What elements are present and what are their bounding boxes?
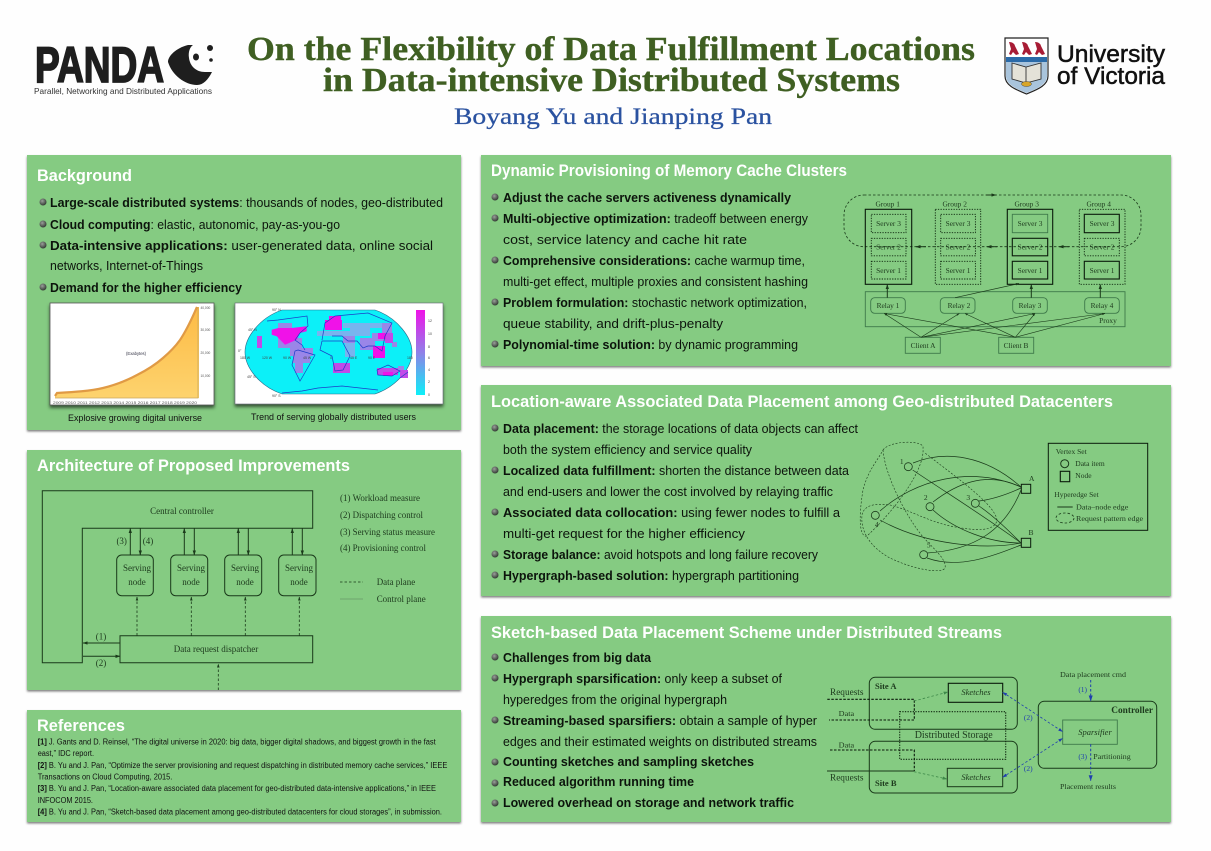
bullet list: sketch-based placement: Reduced algorithm running time — [503, 775, 694, 789]
diagram: architecture: (3) Serving status measure — [340, 527, 435, 537]
bullet list: location-aware placement: Hypergraph-based solution: hypergraph partitioning — [503, 569, 799, 583]
diagram: sketch placement: Site A — [875, 681, 897, 691]
chart: global users map: 4 — [428, 368, 430, 372]
title: On the Flexibility of Data Fulfillment Locations — [247, 31, 975, 68]
bullet list: dynamic provisioning: Comprehensive considerations: cache warmup time, — [503, 254, 805, 268]
diagram: cache clusters: Server 3 — [876, 219, 901, 228]
diagram: sketch placement: (1) — [1078, 685, 1088, 694]
diagram: architecture: node — [290, 577, 308, 587]
chart: global users map: 90° S — [272, 394, 281, 398]
panel: sketch-based placement — [481, 616, 1171, 822]
heading: references: References — [37, 717, 125, 735]
diagram: hypergraph: 2 — [924, 493, 928, 502]
diagram: sketch placement: Requests — [830, 687, 864, 697]
diagram: cache clusters: Relay 1 — [877, 301, 900, 310]
bullet list: dynamic provisioning: multi-get effect, multiple proxies and consistent hashing — [503, 275, 808, 289]
chart: digital universe growth: 10,000 — [200, 374, 210, 378]
title: in Data-intensive Distributed Systems — [323, 62, 900, 99]
diagram: sketch placement: Requests — [830, 772, 864, 782]
bullet list: background: networks, Internet-of-Things — [50, 259, 203, 273]
bullet list: dynamic provisioning: Adjust the cache servers activeness dynamically — [503, 191, 791, 205]
diagram: architecture: (4) — [143, 536, 153, 546]
chart: digital universe growth: 20,000 — [200, 351, 210, 355]
reference list: [2] B. Yu and J. Pan, “Optimize the server provisioning and request dispatching in distributed memory cache services,” IEEE — [38, 761, 447, 770]
diagram: architecture: (3) — [116, 536, 127, 546]
logo: University of Victoria: University — [1057, 41, 1165, 68]
bullet list: dynamic provisioning — [492, 191, 809, 352]
diagram: hypergraph: Request pattern edge — [1076, 514, 1144, 523]
diagram: hypergraph: 5 — [927, 540, 931, 550]
bullet list: background — [40, 196, 443, 295]
reference list: INFOCOM 2015. — [38, 796, 93, 805]
bullet list: dynamic provisioning: Multi-objective optimization: tradeoff between energy — [503, 212, 809, 226]
bullet list: sketch-based placement: Streaming-based sparsifiers: obtain a sample of hyper — [503, 714, 817, 728]
diagram: architecture — [42, 491, 435, 690]
bullet list: sketch-based placement: edges and their estimated weights on distributed streams — [503, 735, 817, 749]
heading: architecture: Architecture of Proposed Improvements — [37, 457, 350, 475]
logo: University of Victoria — [1005, 38, 1166, 94]
diagram: cache clusters: Client A — [911, 341, 936, 350]
bullet list: background: Data-intensive applications: user-generated data, online social — [50, 239, 433, 253]
diagram: sketch placement: (2) — [1024, 764, 1033, 773]
diagram: architecture: (4) Provisioning control — [340, 543, 426, 553]
diagram: cache clusters: Server 1 — [1018, 266, 1043, 275]
chart: digital universe growth: 2009 2010 2011 2012 2013 2014 2015 2016 2017 2018 2019 2020 — [53, 401, 197, 405]
diagram: architecture: Data request dispatcher — [174, 644, 258, 654]
panel: architecture — [27, 450, 461, 690]
bullet list: location-aware placement: Localized data fulfillment: shorten the distance between data — [503, 464, 849, 478]
diagram: cache clusters: Server 3 — [1090, 219, 1115, 228]
diagram: cache clusters: Server 2 — [1090, 242, 1115, 252]
title — [247, 31, 975, 99]
bullet list: sketch-based placement: hyperedges from the original hypergraph — [503, 693, 727, 707]
chart: global users map: 45° S — [247, 375, 256, 379]
bullet list: sketch-based placement: Challenges from big data — [503, 651, 652, 665]
bullet list: background: Demand for the higher efficiency — [50, 281, 242, 295]
diagram: architecture: Central controller — [150, 506, 214, 516]
diagram: cache clusters: Relay 2 — [948, 301, 971, 310]
chart: global users map: 8 — [428, 345, 430, 349]
diagram: architecture: (2) — [96, 658, 106, 668]
diagram: sketch placement: Partitioning — [1093, 752, 1131, 761]
diagram: sketch placement: Site B — [875, 778, 897, 788]
bullet list: sketch-based placement: Counting sketches and sampling sketches — [503, 755, 754, 769]
diagram: cache clusters: Server 2 — [876, 242, 901, 252]
chart: global users map: 10 — [428, 332, 432, 336]
diagram: hypergraph: Data item — [1075, 459, 1105, 468]
bullet list: dynamic provisioning: Problem formulation: stochastic network optimization, — [503, 296, 807, 310]
bullet list: location-aware placement: Data placement: the storage locations of data objects can affect — [503, 422, 859, 436]
diagram: sketch placement: Data — [839, 740, 855, 750]
chart: global users map: 0 — [330, 356, 332, 360]
bullet list: sketch-based placement: Lowered overhead on storage and network traffic — [503, 796, 794, 810]
diagram: architecture: node — [182, 577, 200, 587]
chart: digital universe growth — [50, 303, 214, 405]
reference list: Transactions on Cloud Computing, 2015. — [38, 772, 172, 782]
diagram: sketch placement: Sketches — [961, 772, 991, 782]
diagram: hypergraph — [860, 442, 1148, 571]
heading: location-aware placement: Location-aware Associated Data Placement among Geo-distributed Datacenters — [491, 393, 1113, 411]
diagram: hypergraph: A — [1029, 474, 1035, 483]
caption: digital universe: Explosive growing digital universe — [68, 413, 202, 423]
bullet list: sketch-based placement — [492, 651, 817, 810]
diagram: sketch placement: Controller — [1111, 705, 1153, 715]
logo: PANDA: PANDA — [35, 37, 164, 93]
diagram: cache clusters: Server 2 — [1018, 242, 1043, 252]
panel: references — [27, 710, 461, 822]
chart: digital universe growth: (Exabytes) — [126, 351, 147, 356]
bullet list: location-aware placement: Associated data collocation: using fewer nodes to fulfill a — [503, 506, 840, 520]
chart: global users map: 12 — [428, 319, 432, 323]
diagram: sketch placement: (2) — [1024, 713, 1033, 722]
logo: University of Victoria: of Victoria — [1057, 63, 1166, 90]
diagram: cache clusters: Proxy — [1099, 316, 1117, 325]
chart: global users map: 180 — [407, 356, 413, 360]
bullet list: location-aware placement: multi-get request for the higher efficiency — [503, 527, 746, 541]
authors: Boyang Yu and Jianping Pan — [454, 104, 773, 129]
chart: digital universe growth: 30,000 — [200, 328, 210, 332]
diagram: hypergraph: Hyperedge Set — [1054, 490, 1100, 499]
diagram: cache clusters: Server 1 — [946, 266, 971, 275]
chart: global users map: 45 W — [303, 356, 312, 360]
diagram: cache clusters: Relay 4 — [1091, 301, 1114, 310]
reference list: east,” IDC report. — [38, 749, 94, 758]
bullet list: sketch-based placement: Hypergraph sparsification: only keep a subset of — [503, 672, 783, 686]
diagram: hypergraph: Vertex Set — [1056, 447, 1088, 456]
reference list — [38, 738, 447, 816]
chart: global users map — [235, 303, 443, 404]
chart: global users map: 90° N — [272, 308, 281, 312]
diagram: sketch placement: Data placement cmd — [1060, 670, 1126, 679]
diagram: cache clusters: Relay 3 — [1019, 301, 1042, 310]
panel: background — [27, 155, 461, 430]
diagram: architecture: (1) — [96, 632, 106, 642]
diagram: cache clusters: Group 2 — [942, 200, 967, 208]
bullet list: dynamic provisioning: queue stability, and drift-plus-penalty — [503, 317, 724, 331]
bullet list: location-aware placement: both the system efficiency and service quality — [503, 443, 753, 457]
diagram: architecture: Data plane — [377, 577, 415, 587]
diagram: hypergraph: Data–node edge — [1076, 502, 1129, 512]
diagram: hypergraph: B — [1028, 528, 1034, 537]
diagram: cache clusters: Server 3 — [1018, 219, 1043, 228]
diagram: architecture: node — [236, 577, 254, 587]
diagram: hypergraph: 3 — [966, 493, 970, 502]
caption: global users: Trend of serving globally distributed users — [251, 412, 416, 422]
chart: global users map: 45 E — [350, 356, 358, 360]
diagram: sketch placement: Sketches — [961, 687, 991, 697]
chart: global users map: 90 E — [368, 356, 376, 360]
diagram: architecture: (1) Workload measure — [340, 493, 420, 503]
diagram: cache clusters — [844, 195, 1141, 353]
diagram: cache clusters: Server 1 — [1090, 266, 1115, 275]
panel: dynamic provisioning — [481, 155, 1171, 366]
diagram: hypergraph: 1 — [900, 457, 904, 466]
diagram: sketch placement: Sparsifier — [1078, 727, 1112, 737]
diagram: sketch placement: Data — [839, 709, 855, 718]
diagram: cache clusters: Client B — [1004, 341, 1028, 350]
bullet list: background: Cloud computing: elastic, autonomic, pay-as-you-go — [50, 218, 340, 232]
chart: global users map: 0 — [428, 393, 430, 397]
logo: PANDA: Parallel, Networking and Distributed Applications — [34, 86, 212, 96]
diagram: architecture: node — [128, 577, 146, 587]
chart: global users map: 0° — [238, 349, 242, 353]
chart: global users map: 6 — [428, 356, 430, 360]
bullet list: dynamic provisioning: Polynomial-time solution: by dynamic programming — [503, 338, 798, 352]
diagram: sketch placement: Distributed Storage — [915, 730, 993, 741]
diagram: architecture: Serving — [285, 563, 313, 573]
reference list: [4] B. Yu and J. Pan, “Sketch-based data placement among geo-distributed datacenters for cloud storages”, in submission. — [38, 808, 442, 816]
diagram: cache clusters: Server 1 — [876, 266, 901, 275]
chart: global users map: 2 — [428, 380, 430, 384]
reference list: [3] B. Yu and J. Pan, “Location-aware associated data placement for geo-distributed data-intensive applications,” in IEEE — [38, 784, 436, 793]
diagram: architecture: Serving — [231, 563, 259, 573]
bullet list: location-aware placement: Storage balance: avoid hotspots and long failure recovery — [503, 548, 819, 562]
bullet list: background: Large-scale distributed systems: thousands of nodes, geo-distributed — [50, 196, 443, 210]
diagram: cache clusters: Server 2 — [946, 242, 971, 252]
diagram: hypergraph: Node — [1075, 471, 1092, 480]
heading: sketch-based placement: Sketch-based Data Placement Scheme under Distributed Streams — [491, 624, 1002, 642]
diagram: hypergraph: 4 — [875, 520, 879, 529]
chart: global users map: 120 W — [262, 356, 273, 360]
chart: digital universe growth: 40,000 — [200, 306, 210, 310]
chart: global users map: 180 W — [240, 356, 251, 360]
diagram: architecture: Serving — [123, 563, 151, 573]
diagram: architecture: (2) Dispatching control — [340, 510, 423, 520]
diagram: cache clusters: Server 3 — [946, 219, 971, 228]
bullet list: dynamic provisioning: cost, service latency and cache hit rate — [503, 233, 747, 247]
diagram: cache clusters: Group 1 — [875, 200, 900, 208]
chart: global users map: 90 W — [283, 356, 292, 360]
diagram: cache clusters: Group 3 — [1014, 200, 1039, 208]
panel: location-aware placement — [481, 385, 1171, 596]
diagram: sketch placement: (3) — [1078, 752, 1088, 761]
bullet list: location-aware placement — [492, 422, 859, 583]
diagram: sketch placement — [827, 670, 1157, 793]
heading: background: Background — [37, 167, 132, 185]
heading: dynamic provisioning: Dynamic Provisioning of Memory Cache Clusters — [491, 162, 847, 180]
diagram: architecture: Control plane — [377, 594, 426, 604]
diagram: cache clusters: Group 4 — [1086, 200, 1111, 208]
reference list: [1] J. Gants and D. Reinsel, “The digital universe in 2020: big data, bigger digital shadows, and biggest growth in the fast — [38, 738, 436, 746]
diagram: sketch placement: Placement results — [1060, 782, 1116, 791]
chart: global users map: 45° N — [248, 328, 257, 332]
bullet list: location-aware placement: and end-users and lower the cost involved by relaying traffic — [503, 485, 833, 499]
diagram: architecture: Serving — [177, 563, 205, 573]
